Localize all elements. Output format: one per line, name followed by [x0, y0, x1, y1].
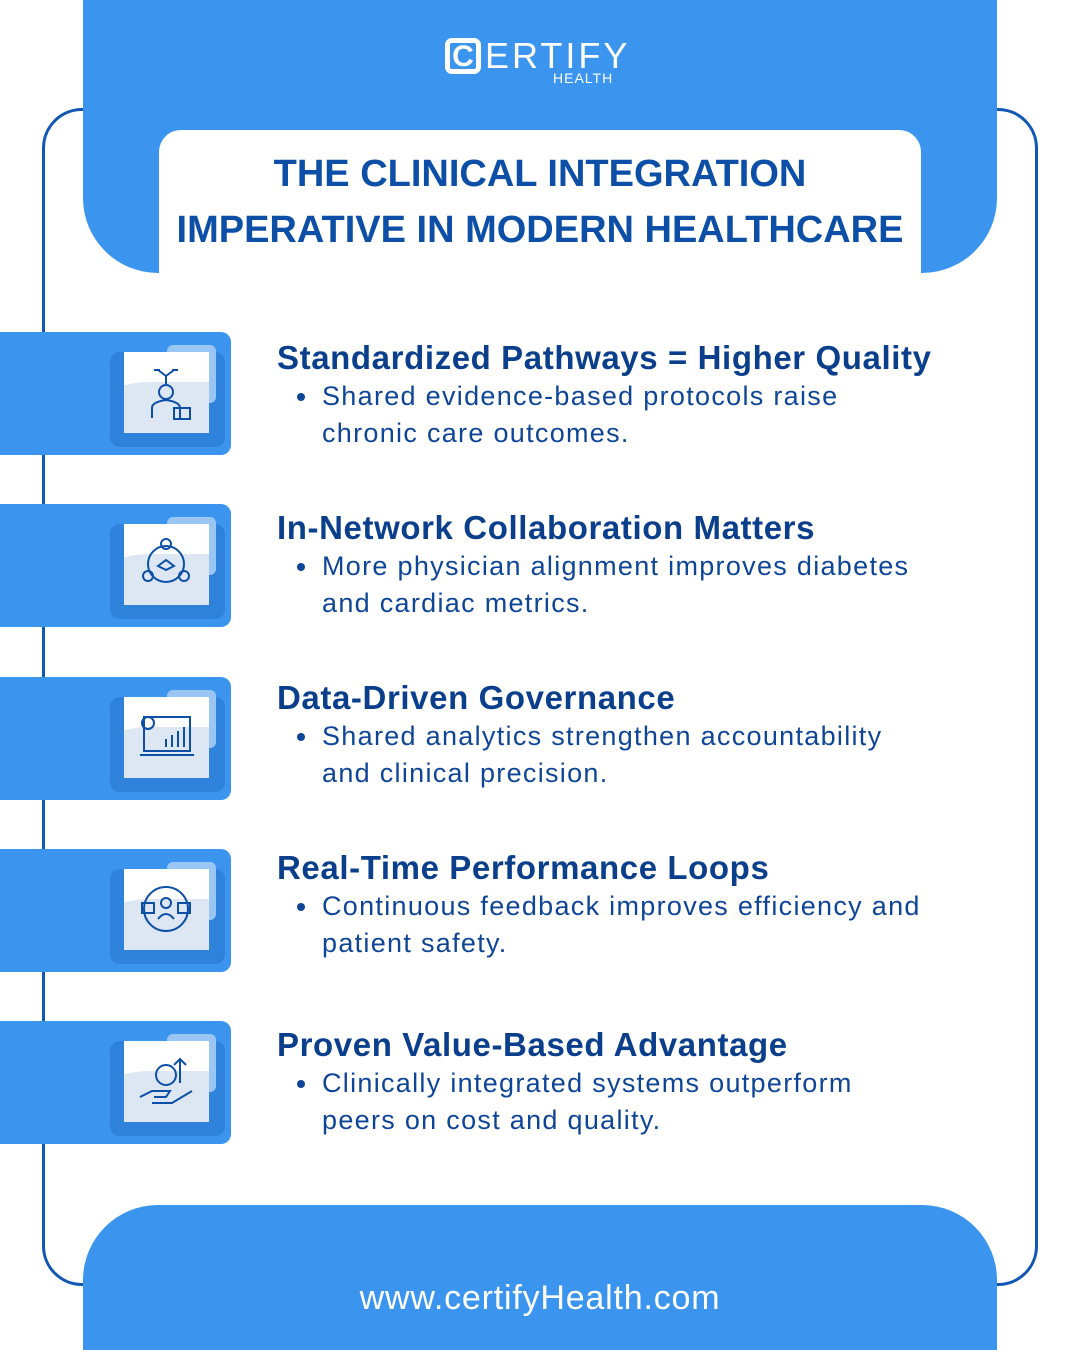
row 4 text: patient safety. [322, 928, 508, 958]
row 1 text: Shared evidence-based protocols raise [322, 381, 838, 411]
row 3 text: Data-Driven Governance [277, 679, 675, 716]
row 1 text [277, 339, 932, 448]
row 5 text: peers on cost and quality. [322, 1105, 662, 1135]
logo: HEALTH [553, 70, 613, 86]
row 4 text: Real-Time Performance Loops [277, 849, 769, 886]
row 3 icon tab [0, 677, 231, 800]
footer band with url [83, 1205, 997, 1350]
row 4 text: Continuous feedback improves efficiency and [322, 891, 921, 921]
logo: ERTIFY [485, 35, 630, 76]
logo: C [452, 40, 474, 73]
row 2 text [277, 509, 909, 618]
row 5 text: Clinically integrated systems outperform [322, 1068, 853, 1098]
row 2 icon tab [0, 504, 231, 627]
row 5 text [277, 1026, 853, 1135]
row 1 text: chronic care outcomes. [322, 418, 630, 448]
row 2 text: More physician alignment improves diabetes [322, 551, 909, 581]
row 2 text: In-Network Collaboration Matters [277, 509, 815, 546]
row 5 text: Proven Value-Based Advantage [277, 1026, 788, 1063]
row 2 text: and cardiac metrics. [322, 588, 590, 618]
logo [445, 35, 630, 86]
header band [83, 0, 997, 273]
row 3 text: Shared analytics strengthen accountability [322, 721, 882, 751]
title box: THE CLINICAL INTEGRATION [274, 153, 806, 195]
row 4 icon tab [0, 849, 231, 972]
title box: IMPERATIVE IN MODERN HEALTHCARE [177, 209, 903, 251]
title box [159, 130, 921, 273]
row 3 text [277, 679, 882, 788]
row 4 text [277, 849, 921, 958]
row 1 text: Standardized Pathways = Higher Quality [277, 339, 932, 376]
row 1 icon tab [0, 332, 231, 455]
row 3 text: and clinical precision. [322, 758, 609, 788]
footer band with url: www.certifyHealth.com [360, 1279, 720, 1317]
row 5 icon tab [0, 1021, 231, 1144]
